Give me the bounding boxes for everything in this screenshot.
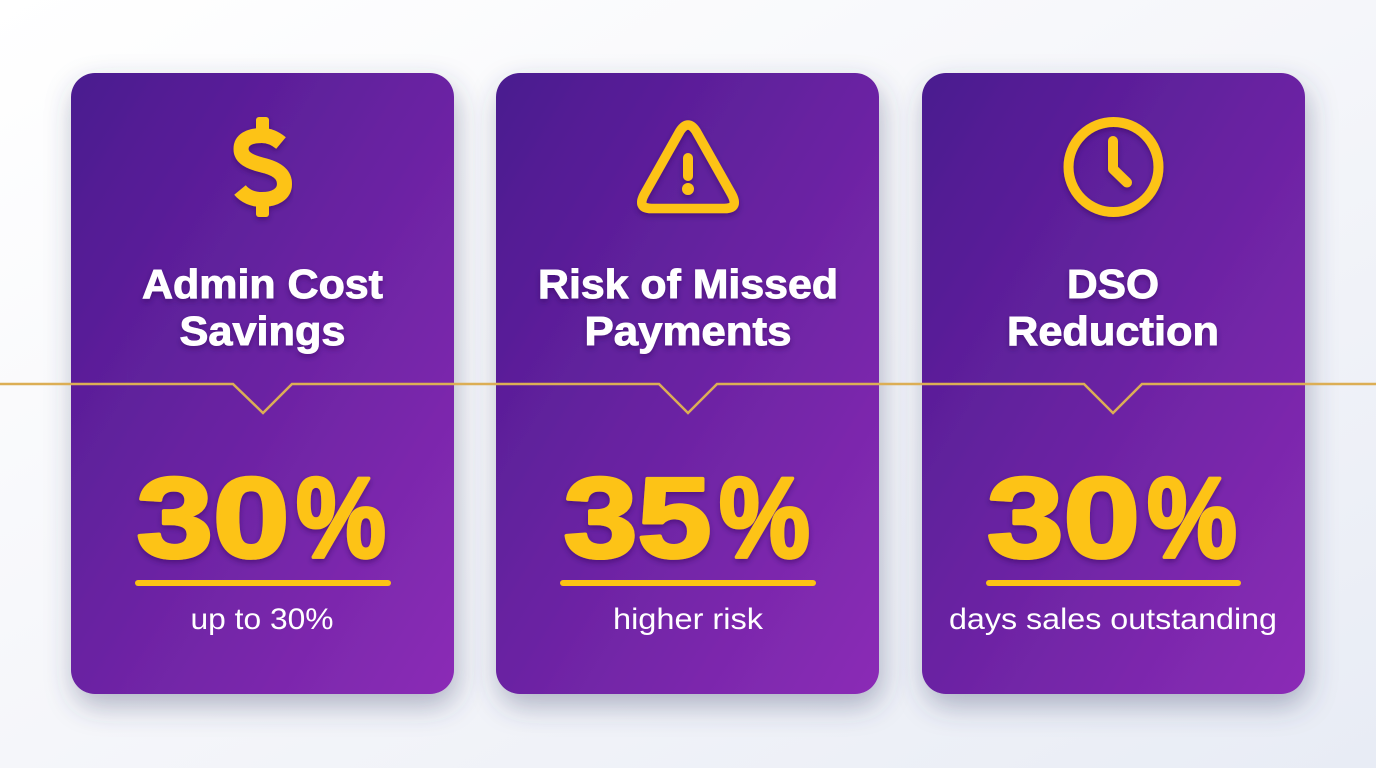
underline [560, 580, 816, 586]
icon: warning triangle [642, 125, 734, 208]
heading: admin cost savings: Savings [180, 308, 346, 354]
heading: risk of missed payments: Payments [584, 308, 792, 354]
panel: dso reduction [922, 73, 1305, 694]
heading: dso reduction [1007, 261, 1219, 354]
stat: 35%: 35 [564, 455, 712, 582]
underline [986, 580, 1241, 586]
stat: 35% [564, 455, 810, 582]
heading: admin cost savings: Admin Cost [142, 261, 383, 307]
stat: 30%: % [1147, 455, 1237, 582]
stat: 30%: 30 [136, 455, 290, 582]
stat: 30% [987, 455, 1237, 582]
stat: 35%: % [719, 455, 810, 582]
panel: risk of missed payments [496, 73, 879, 694]
caption: higher risk: higher risk [613, 603, 763, 636]
heading: dso reduction: DSO [1067, 261, 1159, 307]
caption: up to 30%: up to 30% [190, 603, 334, 636]
caption: days sales outstanding: days sales outstanding [949, 603, 1277, 636]
heading: dso reduction: Reduction [1007, 308, 1219, 354]
stat: 30%: 30 [987, 455, 1140, 582]
heading: risk of missed payments: Risk of Missed [538, 261, 838, 307]
heading: admin cost savings [142, 261, 383, 354]
stat: 30%: % [296, 455, 386, 582]
icon: clock [1068, 122, 1158, 212]
divider line with notches [0, 384, 1376, 413]
panel: admin cost savings [71, 73, 454, 694]
underline [135, 580, 391, 586]
heading: risk of missed payments [538, 261, 838, 354]
stat: 30% [136, 455, 386, 582]
icon: dollar sign [240, 117, 284, 217]
